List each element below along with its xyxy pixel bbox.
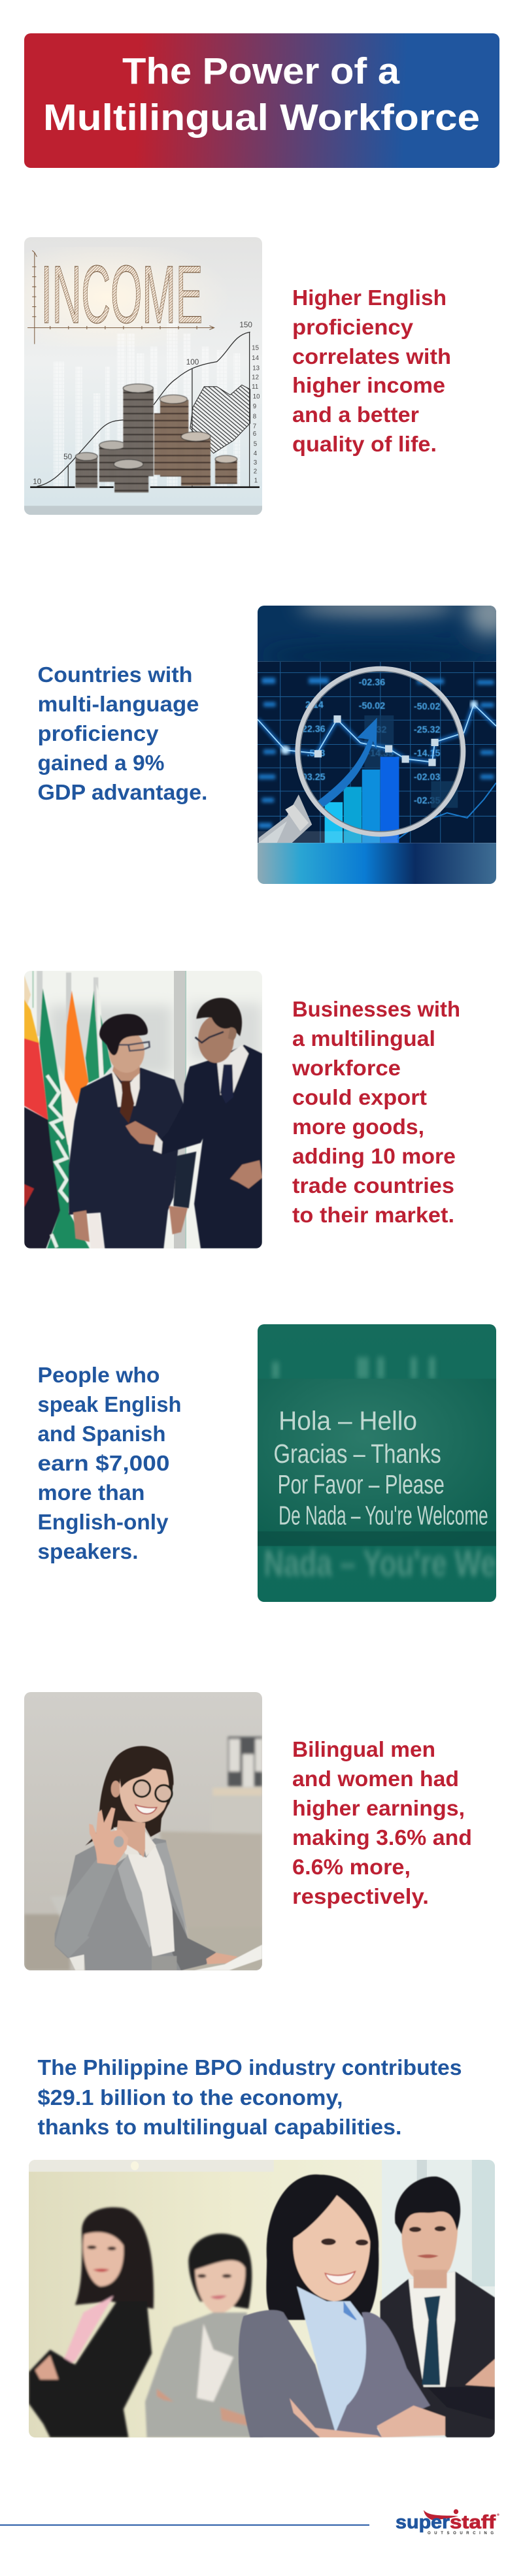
- text: GDP statistic: Countries with: [38, 662, 192, 687]
- photo: magnifying glass over financial chart: -02.36: [359, 677, 385, 688]
- photo: income chart with coin stacks: 50: [63, 453, 73, 461]
- photo: magnifying glass over financial chart: -02.03: [414, 772, 440, 783]
- text: export statistic: Businesses with: [292, 997, 460, 1021]
- photo: income chart with coin stacks: 15: [252, 345, 259, 352]
- text: export statistic: trade countries: [292, 1173, 454, 1198]
- text: export statistic: a multilingual: [292, 1026, 435, 1051]
- photo: magnifying glass over financial chart: -02.35: [414, 796, 440, 806]
- text: English and Spanish earnings statistic: English-only: [38, 1510, 169, 1534]
- text: income statistic: [292, 285, 451, 456]
- photo: income chart with coin stacks: 11: [252, 383, 258, 391]
- text: bilingual earnings statistic: [292, 1737, 472, 1908]
- photo: magnifying glass over financial chart: -14.35: [367, 748, 394, 758]
- text: English and Spanish earnings statistic: speakers.: [38, 1539, 139, 1563]
- text: Philippine BPO statistic: thanks to multilingual capabilities.: [38, 2115, 402, 2139]
- text: English and Spanish earnings statistic: speak English: [38, 1392, 182, 1416]
- photo: income chart with coin stacks: 5: [254, 441, 257, 448]
- photo: magnifying glass over financial chart: -50.02: [414, 702, 440, 712]
- text: English and Spanish earnings statistic: and Spanish: [38, 1422, 166, 1446]
- photo: magnifying glass over financial chart: [258, 606, 496, 884]
- logo swoosh: [424, 2510, 458, 2520]
- text: income statistic: quality of life.: [292, 432, 437, 456]
- title banner: Multilingual Workforce: [43, 97, 480, 139]
- text: income statistic: correlates with: [292, 344, 451, 368]
- title banner: The Power of a: [122, 50, 400, 92]
- photo: income chart with coin stacks: 12: [252, 374, 259, 382]
- text: income statistic: higher income: [292, 373, 445, 397]
- text: income statistic: Higher English: [292, 285, 447, 310]
- text: income statistic: proficiency: [292, 315, 414, 339]
- photo: income chart with coin stacks: [24, 237, 262, 515]
- photo: income chart with coin stacks: 10: [33, 478, 42, 486]
- text: English and Spanish earnings statistic: more than: [38, 1480, 145, 1505]
- text: English and Spanish earnings statistic: People who: [38, 1363, 160, 1387]
- logo: SuperStaff Outsourcing: OUTSOURCING: [428, 2532, 494, 2535]
- text: Philippine BPO statistic: The Philippine BPO industry contributes: [38, 2055, 462, 2079]
- photo: chalkboard with Spanish and English phrases: Nada – You're We: [263, 1544, 496, 1584]
- text: income statistic: and a better: [292, 402, 419, 427]
- text: export statistic: could export: [292, 1085, 427, 1109]
- logo: SuperStaff Outsourcing: [396, 2509, 499, 2535]
- text: GDP statistic: [38, 662, 208, 804]
- photo: income chart with coin stacks: 2: [254, 468, 257, 475]
- photo: magnifying glass over financial chart: -14.15: [414, 748, 440, 758]
- photo: income chart with coin stacks: 100: [186, 358, 199, 367]
- photo: income chart with coin stacks: 1: [254, 478, 258, 485]
- text: GDP statistic: GDP advantage.: [38, 780, 208, 804]
- text: Philippine BPO statistic: [38, 2055, 462, 2139]
- photo: chalkboard with Spanish and English phrases: [258, 1324, 496, 1602]
- photo: magnifying glass over financial chart: 22.36: [302, 725, 326, 735]
- text: GDP statistic: multi-language: [38, 692, 199, 716]
- text: export statistic: to their market.: [292, 1203, 454, 1227]
- photo: magnifying glass over financial chart: -25.32: [414, 725, 440, 736]
- title banner: [24, 33, 499, 168]
- photo: income chart with coin stacks: 10: [253, 393, 260, 400]
- photo: chalkboard with Spanish and English phrases: Hola – Hello: [278, 1406, 417, 1435]
- text: bilingual earnings statistic: and women had: [292, 1767, 459, 1791]
- man left: [69, 1068, 183, 1248]
- text: Philippine BPO statistic: $29.1 billion to the economy,: [38, 2085, 343, 2110]
- photo: smiling woman making OK sign: [24, 1692, 262, 1970]
- text: bilingual earnings statistic: Bilingual men: [292, 1737, 435, 1761]
- photo: income chart with coin stacks: 150: [239, 321, 252, 329]
- footer rule: [0, 2524, 369, 2526]
- photo: income chart with coin stacks: 8: [253, 414, 256, 421]
- photo: income chart with coin stacks: 6: [253, 431, 256, 438]
- logo: SuperStaff Outsourcing: super: [396, 2512, 450, 2533]
- text: English and Spanish earnings statistic: earn $7,000: [38, 1451, 170, 1475]
- text: bilingual earnings statistic: higher earnings,: [292, 1796, 465, 1820]
- photo: magnifying glass over financial chart: 2.14: [305, 700, 324, 710]
- text: English and Spanish earnings statistic: [38, 1363, 182, 1563]
- man right: [160, 1045, 262, 1248]
- text: export statistic: more goods,: [292, 1115, 424, 1139]
- text: bilingual earnings statistic: 6.6% more,: [292, 1855, 411, 1879]
- text: export statistic: workforce: [292, 1056, 401, 1080]
- photo: income chart with coin stacks: 14: [252, 355, 260, 362]
- photo: income chart with coin stacks: 13: [252, 365, 260, 372]
- photo: income chart with coin stacks: 7: [253, 423, 256, 431]
- text: bilingual earnings statistic: making 3.6% and: [292, 1825, 472, 1850]
- text: export statistic: [292, 997, 460, 1227]
- text: bilingual earnings statistic: respectively.: [292, 1884, 429, 1908]
- photo: chalkboard with Spanish and English phrases: Por Favor – Please: [278, 1469, 445, 1499]
- photo: income chart with coin stacks: 3: [254, 459, 257, 466]
- photo: magnifying glass over financial chart: -50.02: [359, 701, 385, 711]
- photo: four smiling business professionals: [29, 2160, 495, 2437]
- photo: magnifying glass over financial chart: .503: [307, 748, 325, 758]
- photo: income chart with coin stacks: 4: [254, 450, 258, 457]
- text: export statistic: adding 10 more: [292, 1144, 456, 1168]
- photo: chalkboard with Spanish and English phrases: Gracias – Thanks: [274, 1439, 441, 1469]
- photo: magnifying glass over financial chart: .32: [374, 725, 387, 736]
- text: GDP statistic: gained a 9%: [38, 751, 165, 775]
- photo: magnifying glass over financial chart: 03.25: [302, 772, 326, 783]
- photo: two businessmen and international flags: [24, 971, 262, 1248]
- text: GDP statistic: proficiency: [38, 721, 159, 745]
- photo: income chart with coin stacks: 9: [253, 403, 256, 410]
- logo: SuperStaff Outsourcing: staff: [450, 2512, 496, 2533]
